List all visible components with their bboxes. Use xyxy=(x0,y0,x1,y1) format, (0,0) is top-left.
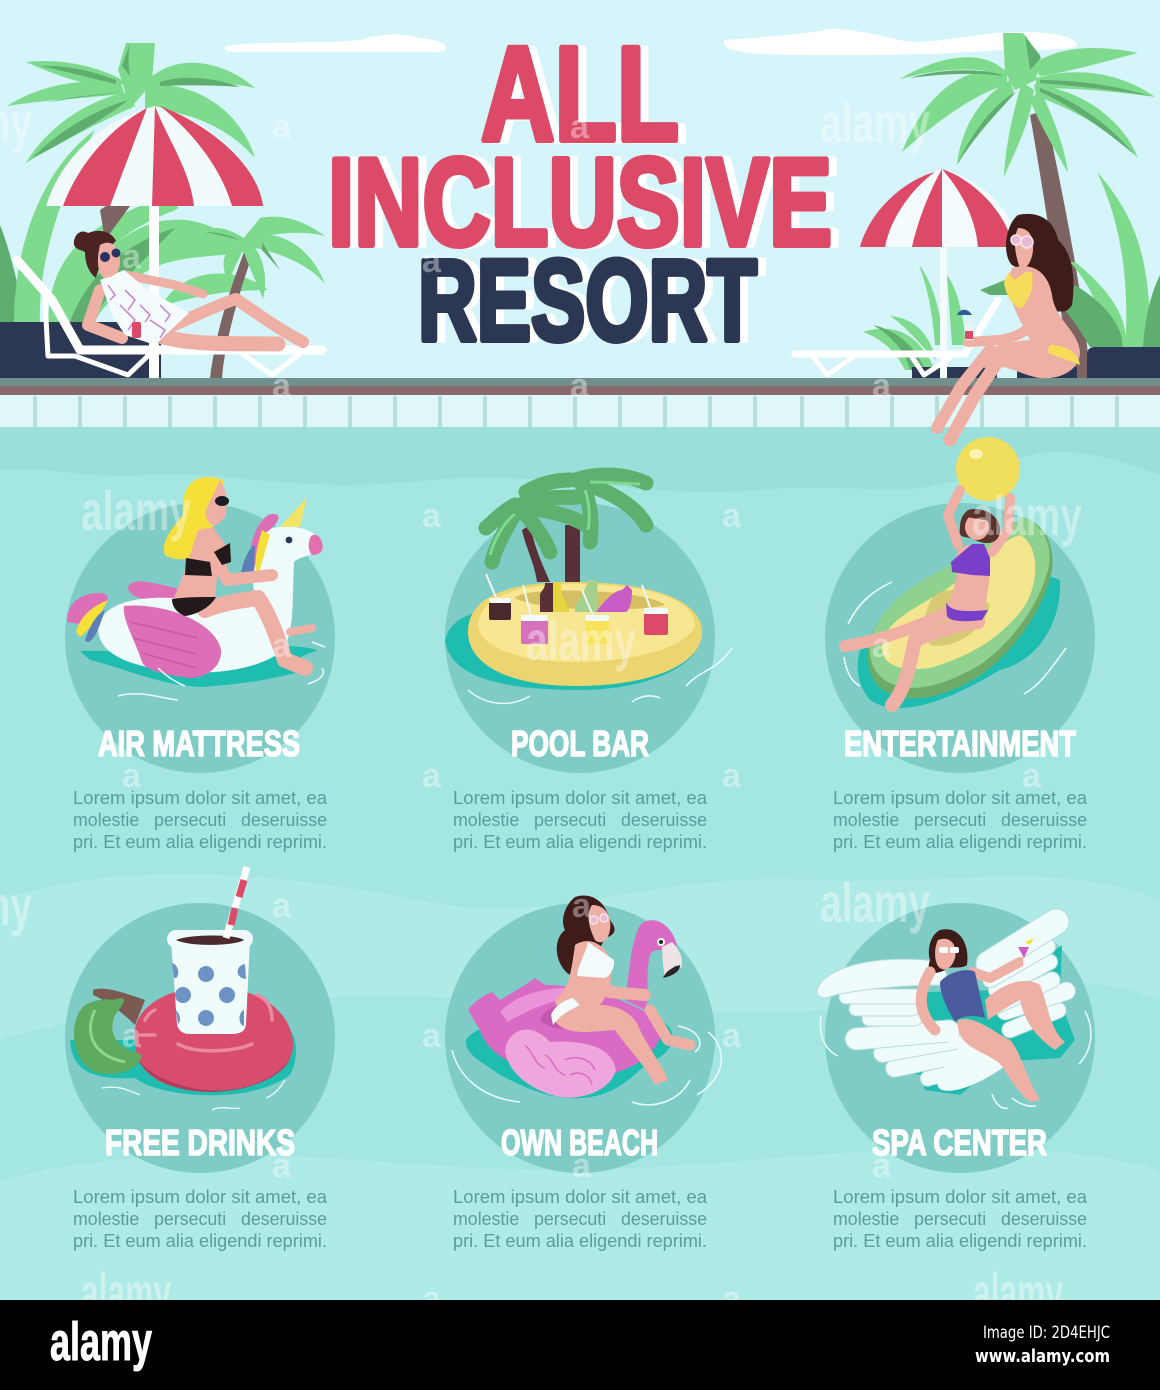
watermarks: a xyxy=(272,108,292,146)
martini xyxy=(1018,938,1034,968)
description: pri. Et eum alia eligendi reprimi. xyxy=(833,1231,1087,1251)
watermarks: a xyxy=(422,242,442,280)
navy blocks xyxy=(912,347,1160,378)
mane and horn xyxy=(280,497,307,527)
description: Lorem ipsum dolor sit amet, ea xyxy=(73,788,328,808)
description: molestie persecuti deseruisse xyxy=(453,810,707,830)
watermarks: alamy xyxy=(81,1261,171,1324)
plants by lounger xyxy=(863,265,965,370)
arms xyxy=(948,490,1010,552)
cloud right xyxy=(724,29,1077,55)
face xyxy=(1015,228,1033,268)
polka dots xyxy=(172,963,246,1026)
umbrella left xyxy=(46,106,263,378)
title shadow xyxy=(336,21,840,365)
head xyxy=(960,509,1000,543)
yellow ring xyxy=(468,582,702,686)
watermarks: a xyxy=(272,1147,292,1185)
hair xyxy=(557,896,615,978)
straw xyxy=(226,867,247,938)
head xyxy=(98,243,120,278)
pool deck xyxy=(0,378,1160,427)
circle xyxy=(65,903,335,1173)
watermarks: a xyxy=(122,1017,142,1055)
sunglasses xyxy=(100,248,120,262)
description: pri. Et eum alia eligendi reprimi. xyxy=(73,832,327,852)
purple bikini xyxy=(951,544,990,576)
illustration: avocado float and ball xyxy=(844,437,1066,708)
illustration: angel wing float xyxy=(817,904,1091,1108)
description: molestie persecuti deseruisse xyxy=(453,1209,707,1229)
alamy logo: alamy xyxy=(50,1312,152,1372)
woman sitting on pool edge xyxy=(937,214,1080,440)
description: molestie persecuti deseruisse xyxy=(833,810,1087,830)
ball xyxy=(956,437,1020,501)
hair xyxy=(929,929,968,973)
torso and thigh xyxy=(981,266,1080,378)
description xyxy=(73,1187,328,1251)
watermarks: a xyxy=(422,497,442,535)
watermarks: alamy xyxy=(820,871,930,934)
arm xyxy=(968,285,1040,342)
legs xyxy=(845,612,978,705)
circle xyxy=(825,503,1095,773)
description: pri. Et eum alia eligendi reprimi. xyxy=(453,1231,707,1251)
right wing feathers xyxy=(971,904,1078,1040)
palm tree left xyxy=(7,43,255,240)
black bikini xyxy=(172,543,231,616)
website: www.alamy.com xyxy=(975,1346,1110,1367)
fronds xyxy=(486,475,646,562)
legs xyxy=(958,981,1065,1102)
heading: SPA CENTER xyxy=(872,1122,1047,1163)
pink glasses xyxy=(1011,235,1033,248)
watermarks: a xyxy=(572,1147,592,1185)
circle xyxy=(445,503,715,773)
rider hair xyxy=(164,477,223,559)
right poolside scene xyxy=(795,33,1160,378)
description: Lorem ipsum dolor sit amet, ea xyxy=(453,788,708,808)
watermarks: a xyxy=(422,1280,442,1318)
right tall leaves xyxy=(1070,172,1150,347)
description: Lorem ipsum dolor sit amet, ea xyxy=(73,1187,328,1207)
cup xyxy=(171,940,250,1034)
title words: INCLUSIVE xyxy=(328,134,832,272)
watermarks: a xyxy=(722,1280,742,1318)
panel: spa center xyxy=(817,903,1095,1251)
bush left xyxy=(0,225,24,322)
watermarks: a xyxy=(272,887,292,925)
description: Lorem ipsum dolor sit amet, ea xyxy=(833,1187,1088,1207)
watermarks: a xyxy=(722,1017,742,1055)
watermarks: alamy xyxy=(526,609,636,672)
watermarks: a xyxy=(872,1147,892,1185)
description xyxy=(833,1187,1088,1251)
description: molestie persecuti deseruisse xyxy=(833,1209,1087,1229)
title shadow: ALL xyxy=(489,21,687,170)
description: pri. Et eum alia eligendi reprimi. xyxy=(453,832,707,852)
image id: Image ID: 2D4EHJC xyxy=(983,1323,1110,1343)
title shadow: RESORT xyxy=(426,237,765,365)
footer bar xyxy=(0,1300,1160,1390)
hair xyxy=(74,231,116,278)
watermarks: alamy xyxy=(81,479,191,542)
torso swimsuit xyxy=(100,270,189,345)
heading: POOL BAR xyxy=(511,723,649,764)
rider body xyxy=(172,527,230,603)
title shadow: INCLUSIVE xyxy=(336,134,840,272)
small palm xyxy=(192,217,325,378)
panel: pool bar xyxy=(445,475,732,852)
rider leg xyxy=(205,598,312,668)
yellow bikini xyxy=(1004,272,1080,365)
large leaves behind lounge xyxy=(14,130,268,322)
watermarks: a xyxy=(872,367,892,405)
title words: RESORT xyxy=(418,237,757,365)
blue swimsuit xyxy=(940,970,985,1022)
lower legs xyxy=(937,350,1000,440)
far leg xyxy=(650,1010,690,1045)
watermarks: alamy xyxy=(973,1261,1063,1324)
description xyxy=(833,788,1088,852)
trunks xyxy=(522,525,580,582)
lounger right xyxy=(795,300,998,375)
watermarks: a xyxy=(722,757,742,795)
cloud left xyxy=(225,34,446,52)
torso xyxy=(945,544,990,615)
watermarks: a xyxy=(722,497,742,535)
legs xyxy=(160,299,303,344)
description: pri. Et eum alia eligendi reprimi. xyxy=(73,1231,327,1251)
face xyxy=(589,905,610,942)
arms xyxy=(921,962,1020,1030)
left wing feathers xyxy=(817,959,968,1088)
navy sun bed base xyxy=(0,322,161,378)
panel: free drinks xyxy=(65,867,335,1251)
watermarks: a xyxy=(422,1017,442,1055)
description xyxy=(453,1187,708,1251)
watermarks: alamy xyxy=(820,91,930,154)
watermarks: alamy xyxy=(972,484,1082,547)
thigh and lower leg xyxy=(552,1002,668,1085)
illustration: unicorn float xyxy=(67,477,325,700)
circle xyxy=(65,503,335,773)
description: pri. Et eum alia eligendi reprimi. xyxy=(833,832,1087,852)
left poolside scene xyxy=(0,43,325,378)
illustration: drink in apple ring xyxy=(70,867,296,1110)
circle xyxy=(445,903,715,1173)
watermarks: a xyxy=(122,757,142,795)
heading: ENTERTAINMENT xyxy=(844,723,1076,764)
description xyxy=(453,788,708,852)
tail xyxy=(938,1036,1013,1091)
watermarks: a xyxy=(122,238,142,276)
title xyxy=(328,20,840,365)
description: molestie persecuti deseruisse xyxy=(73,810,327,830)
heading: AIR MATTRESS xyxy=(98,723,300,764)
description: molestie persecuti deseruisse xyxy=(73,1209,327,1229)
title words: ALL xyxy=(481,20,679,169)
woman sunbathing xyxy=(74,231,303,345)
heading: OWN BEACH xyxy=(501,1122,658,1163)
white sunglasses xyxy=(939,947,959,953)
watermarks: a xyxy=(272,367,292,405)
apple leaf xyxy=(74,998,142,1074)
bottles xyxy=(540,583,557,612)
watermarks: a xyxy=(272,627,292,665)
pool water background xyxy=(0,427,1160,1300)
description xyxy=(73,788,328,852)
illustration: palm island bar xyxy=(445,475,732,703)
arms xyxy=(88,275,203,338)
head xyxy=(935,939,956,970)
watermarks: a xyxy=(1022,757,1042,795)
sunglasses xyxy=(215,496,229,506)
watermarks: a xyxy=(422,757,442,795)
white bikini xyxy=(551,942,614,1025)
panel: air mattress xyxy=(65,477,335,852)
body xyxy=(555,941,612,1013)
jars with straws xyxy=(489,598,668,644)
sky background xyxy=(0,0,1160,380)
watermarks: a xyxy=(570,367,590,405)
cocktail xyxy=(132,322,141,338)
heading: FREE DRINKS xyxy=(105,1122,295,1163)
palm tree right xyxy=(900,33,1155,378)
wing xyxy=(505,1030,616,1098)
panel: entertainment xyxy=(825,437,1095,852)
description: Lorem ipsum dolor sit amet, ea xyxy=(453,1187,708,1207)
hair back xyxy=(1006,214,1074,312)
panel: own beach xyxy=(445,896,721,1251)
lounger xyxy=(17,260,322,375)
watermarks: a xyxy=(570,108,590,146)
title words xyxy=(328,20,832,365)
description: Lorem ipsum dolor sit amet, ea xyxy=(833,788,1088,808)
watermarks: a xyxy=(572,887,592,925)
illustration: flamingo float xyxy=(452,896,721,1105)
circle xyxy=(825,903,1095,1173)
umbrella right xyxy=(860,169,1020,378)
watermarks: a xyxy=(872,627,892,665)
neck head xyxy=(625,920,677,1010)
cocktail glass xyxy=(957,310,973,340)
